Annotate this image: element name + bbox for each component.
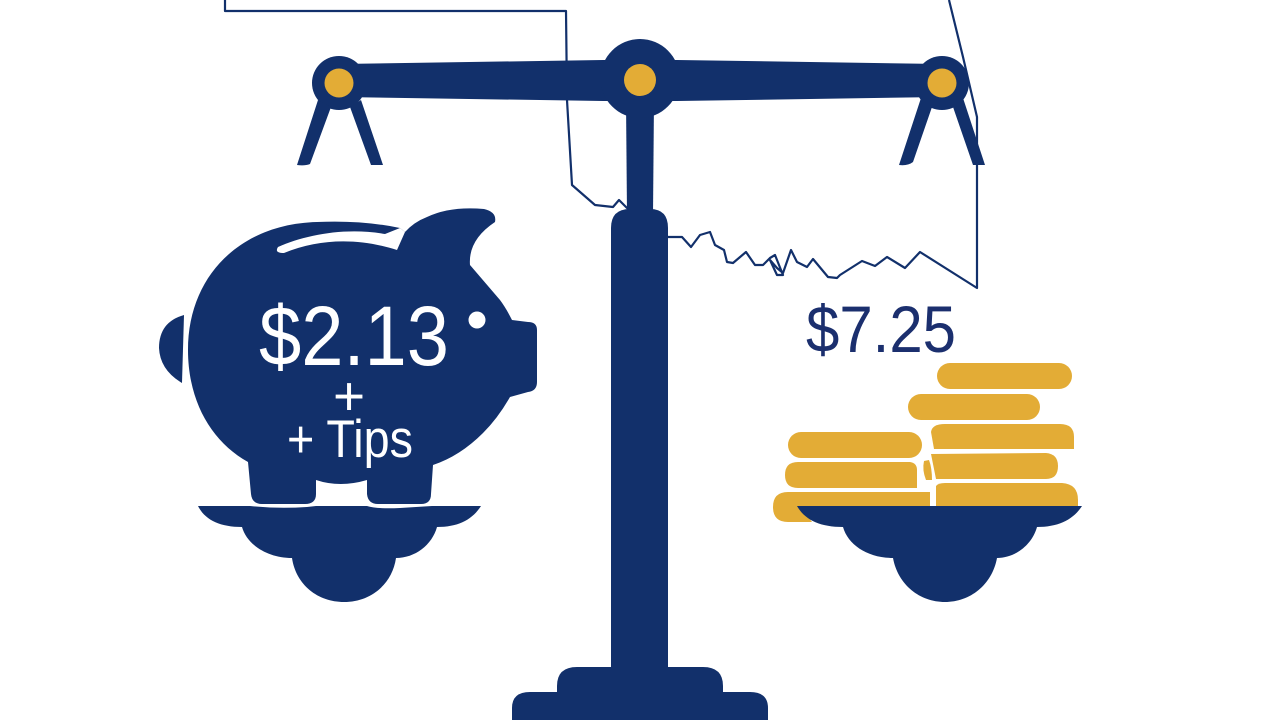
piggy bank: [159, 208, 537, 504]
scale beam: [312, 39, 969, 118]
left pan: [198, 506, 481, 602]
right pan: [797, 506, 1082, 602]
tips label: + Tips: [287, 410, 413, 469]
state outline map: [225, 0, 977, 288]
plus sign: +: [333, 365, 365, 427]
gold coin stack: [773, 363, 1078, 522]
scale stand: [512, 100, 768, 720]
minimum wage label: $7.25: [806, 292, 956, 366]
left pan hanger: [297, 100, 383, 165]
right pan hanger: [899, 98, 985, 165]
tipped wage label: $2.13: [259, 289, 449, 383]
